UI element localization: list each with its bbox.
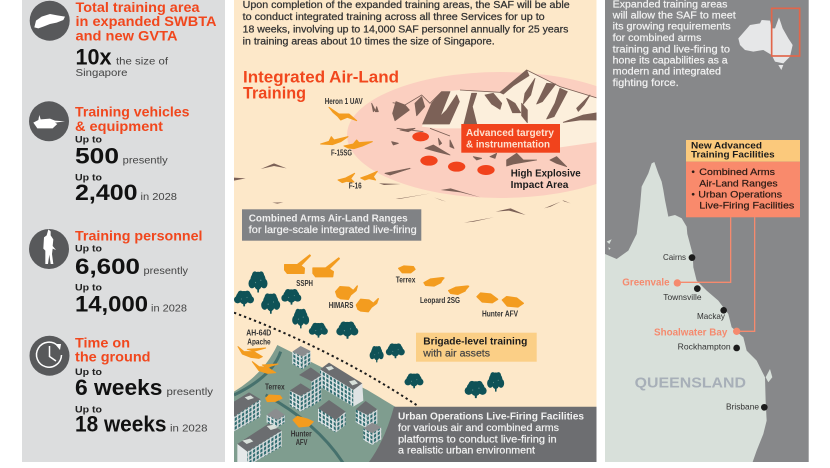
callout: new advanced training facilities: • (692, 167, 695, 178)
stat: training personnel: presently (144, 266, 188, 277)
stat: total training area: and new GVTA (76, 28, 178, 44)
text block: introduction: Upon completion of the expanded training areas, the SAF will be able (243, 0, 570, 11)
city labels (663, 252, 759, 412)
vehicle labels: AH-64D (246, 329, 271, 338)
vehicle labels: Apache (247, 337, 271, 346)
heading: Integrated Air-Land Training: Training (243, 84, 306, 103)
label box: urban operations: for various air and combined arms (398, 423, 559, 434)
label box: urban operations: platforms to conduct live-firing in (398, 434, 557, 445)
urban ground (234, 345, 401, 467)
text block: introduction: to conduct integrated training across all three Services for up to (243, 12, 545, 23)
stat: training vehicles: Training vehicles (75, 103, 190, 119)
stat: total training area (76, 0, 216, 79)
label: high explosive impact area: Impact Area (511, 180, 569, 191)
aircraft labels: F-16 (349, 182, 362, 191)
stat: time on the ground: Time on (75, 334, 130, 350)
city labels: Cairns (663, 252, 686, 262)
stat: training personnel: Up to (75, 283, 103, 293)
orange vehicles (285, 255, 523, 312)
stat: training personnel: 6,600 (75, 254, 140, 279)
aircraft labels (325, 97, 363, 191)
map: Queensland (605, 162, 772, 462)
illustration: mountains (372, 70, 600, 175)
city labels: Brisbane (726, 402, 759, 412)
stat: total training area: 10x (76, 45, 112, 70)
text block: description: its growing requirements (613, 22, 731, 33)
stat: training personnel: 14,000 (75, 292, 148, 317)
vehicle labels: Hunter AFV (482, 309, 519, 318)
stat: total training area: in expanded SWBTA (76, 13, 216, 29)
stat: training vehicles: Up to (75, 172, 103, 182)
trees (234, 271, 504, 398)
stat: training vehicles: & equipment (75, 118, 163, 134)
label box: brigade-level training: Brigade-level training (423, 337, 527, 348)
stat: training vehicles: presently (123, 155, 168, 166)
stat: training vehicles: 2,400 (75, 180, 138, 205)
callout: new advanced training facilities: Training Facilities (691, 150, 775, 161)
impact area ellipse (347, 72, 596, 198)
vehicle labels: SSPH (296, 279, 313, 288)
label box: brigade-level training (416, 333, 537, 362)
panel: integrated training scene (234, 0, 596, 462)
aircraft labels: F-15SG (331, 149, 352, 158)
stat: time on the ground: Up to (75, 367, 103, 377)
icon: Singapore map (30, 1, 70, 41)
label box: combined arms ranges (242, 209, 421, 241)
callout: advanced targetry: & instrumentation (466, 139, 550, 150)
label box: combined arms ranges: for large-scale integrated live-firing (249, 225, 417, 236)
connector lines (677, 217, 755, 331)
label box: urban operations: a realistic urban environment (398, 446, 535, 457)
label: high explosive impact area (511, 169, 581, 191)
city labels: Rockhampton (678, 342, 731, 352)
ridge lines (393, 70, 598, 136)
vehicle labels (246, 275, 519, 447)
label: high explosive impact area: High Explosive (511, 169, 581, 180)
stat: total training area: Singapore (76, 68, 128, 79)
text block: description: modern and integrated (613, 67, 721, 78)
buildings (290, 346, 381, 445)
callout: advanced targetry (461, 124, 560, 153)
icon: tank (29, 101, 69, 141)
callout: new advanced training facilities: Combined Arms (699, 167, 775, 178)
callout: new advanced training facilities: Air-Land Ranges (699, 178, 778, 189)
city labels: Mackay (697, 311, 726, 321)
text block: introduction: 18 weeks, involving up to 14,000 SAF personnel annually for 25 years (243, 24, 568, 35)
callout: advanced targetry: Advanced targetry (466, 128, 554, 139)
stat: training vehicles: 500 (75, 143, 119, 168)
stat: training personnel: Up to (75, 244, 103, 254)
text block: introduction (243, 0, 570, 48)
stat: training personnel (75, 228, 202, 317)
label: QUEENSLAND: QUEENSLAND (635, 374, 746, 391)
callout: new advanced training facilities: Live-Firing Facilities (699, 201, 795, 212)
text block: description: will allow the SAF to meet (612, 11, 736, 22)
aircraft: Heron and fighter jets (321, 107, 377, 183)
stat: time on the ground: the ground (75, 348, 150, 364)
label box: urban operations (369, 407, 597, 462)
site labels (622, 278, 728, 338)
icon: clock (30, 336, 70, 376)
dotted boundary (234, 313, 418, 406)
stat: total training area: the size of (116, 57, 168, 68)
stat: time on the ground: in 2028 (170, 423, 208, 434)
helicopters and urban vehicles (238, 347, 313, 427)
stat: training vehicles (75, 103, 190, 205)
stat: training personnel: in 2028 (151, 304, 187, 315)
callout: new advanced training facilities: Urban Operations (698, 189, 782, 200)
red target markers (412, 132, 495, 175)
vehicle labels: Hunter (291, 430, 312, 439)
urban foreground buildings (234, 392, 285, 462)
panel: Australia map (605, 0, 809, 462)
vehicle labels: Terrex (396, 275, 416, 284)
site labels: Greenvale (622, 278, 670, 289)
callout: new advanced training facilities: • (692, 189, 695, 200)
label box: brigade-level training: with air assets (422, 348, 490, 359)
stat: time on the ground: Up to (75, 404, 103, 414)
vehicle labels: HIMARS (329, 301, 354, 310)
stat: time on the ground: 18 weeks (75, 411, 166, 436)
text block: description: for combined arms (613, 33, 701, 44)
stat: time on the ground: 6 weeks (75, 375, 162, 400)
text block: description: hone its capabilities as a (613, 56, 728, 67)
stat: time on the ground (75, 334, 213, 436)
terrain strokes (234, 163, 571, 223)
roads (234, 352, 343, 463)
text block: introduction: in training areas about 10 times the size of Singapore. (243, 37, 495, 48)
location dots (689, 254, 768, 411)
text block: description: training and live-firing to (613, 44, 730, 55)
text block: description (612, 0, 736, 89)
callout: new advanced training facilities: New Advanced (691, 141, 762, 152)
icon: soldier (29, 229, 69, 269)
vehicle labels: Leopard 2SG (420, 296, 460, 305)
vehicle labels: AFV (296, 438, 308, 447)
aircraft labels: Heron 1 UAV (325, 97, 363, 106)
training site markers (674, 279, 740, 335)
stat: training vehicles: Up to (75, 134, 103, 144)
label box: combined arms ranges: Combined Arms Air-Land Ranges (249, 214, 408, 225)
text block: description: fighting force. (613, 78, 679, 89)
stat: training personnel: Training personnel (75, 228, 202, 244)
heading: Integrated Air-Land Training (243, 70, 398, 102)
city labels: Townsville (663, 292, 702, 302)
panel: key statistics (22, 0, 225, 462)
site labels: Shoalwater Bay (654, 327, 728, 338)
vehicle labels: Terrex (265, 382, 285, 391)
stat: time on the ground: presently (166, 387, 213, 398)
illustration: urban area, vehicles and trees (234, 255, 523, 467)
heading: Integrated Air-Land Training: Integrated Air-Land (243, 67, 399, 86)
stat: training vehicles: in 2028 (140, 192, 177, 203)
label box: urban operations: Urban Operations Live-Firing Facilities (398, 411, 584, 422)
locator map: Australia (738, 8, 800, 70)
callout: new advanced training facilities (686, 140, 800, 217)
